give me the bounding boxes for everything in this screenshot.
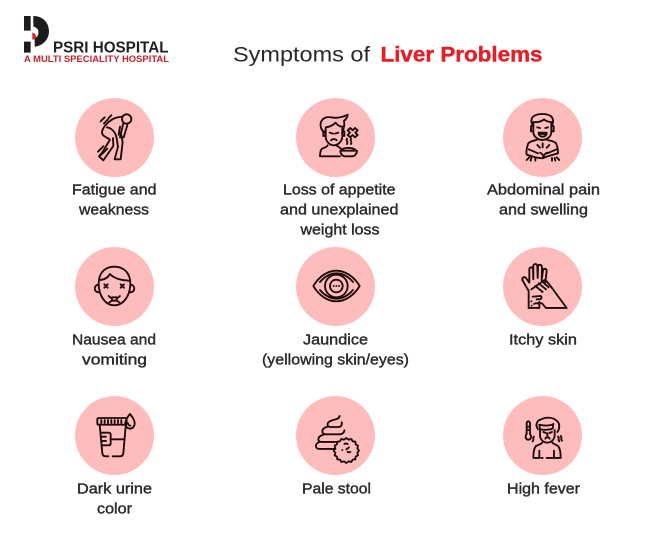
icon: stool with germ xyxy=(316,416,359,463)
icon circle xyxy=(296,247,375,326)
icon: scratching hands xyxy=(522,264,567,308)
symptom: high fever xyxy=(503,396,582,498)
label: Dark urine xyxy=(77,482,152,498)
symptom: itchy skin xyxy=(503,247,582,349)
symptom: nausea and vomiting xyxy=(72,247,156,369)
symptom: loss of appetite: weight loss xyxy=(299,223,380,239)
label: Nausea and xyxy=(72,333,156,349)
label: Loss of appetite xyxy=(283,183,396,199)
symptom: pale stool xyxy=(296,396,375,498)
icon circle xyxy=(296,98,375,177)
icon: feverish person with thermometer xyxy=(526,418,562,458)
icon: person holding stomach xyxy=(526,114,559,161)
symptom: fatigue and weakness: weakness xyxy=(78,203,149,219)
label: Itchy skin xyxy=(509,333,577,349)
logo: PSRI Hospital xyxy=(24,16,170,64)
symptom: loss of appetite: and unexplained xyxy=(280,203,398,219)
icon circle xyxy=(503,247,582,326)
symptom: jaundice xyxy=(262,247,409,369)
label: Abdominal pain xyxy=(487,183,600,199)
icon circle xyxy=(75,396,154,475)
title: Liver Problems xyxy=(380,43,543,67)
icon: eye xyxy=(313,271,360,301)
icon: sad person with bowl xyxy=(320,115,358,156)
logo name: PSRI HOSPITAL xyxy=(53,40,169,57)
symptom: dark urine color xyxy=(75,396,154,518)
symptom: abdominal pain: and swelling xyxy=(499,203,588,219)
label: Fatigue and xyxy=(72,183,156,199)
icon circle xyxy=(75,247,154,326)
icon: tired bent person xyxy=(98,114,131,160)
symptom: jaundice: (yellowing skin/eyes) xyxy=(262,353,409,369)
icon: nauseous face xyxy=(95,267,134,305)
logo mark xyxy=(24,16,49,53)
logo tagline: A MULTI SPECIALITY HOSPITAL xyxy=(24,54,170,64)
symptom: dark urine color: color xyxy=(97,502,132,518)
symptom: loss of appetite xyxy=(280,98,398,239)
label: High fever xyxy=(507,482,580,498)
icon circle xyxy=(503,98,582,177)
label: Jaundice xyxy=(303,333,368,349)
symptom: nausea and vomiting: vomiting xyxy=(82,353,147,369)
icon circle xyxy=(503,396,582,475)
icon: urine sample cup xyxy=(97,414,135,456)
icon circle xyxy=(75,98,154,177)
title: Symptoms of xyxy=(233,43,370,67)
title xyxy=(233,43,543,67)
symptom: abdominal pain xyxy=(487,98,600,219)
label: Pale stool xyxy=(302,482,371,498)
symptom: fatigue and weakness xyxy=(72,98,156,219)
icon circle xyxy=(296,396,375,475)
